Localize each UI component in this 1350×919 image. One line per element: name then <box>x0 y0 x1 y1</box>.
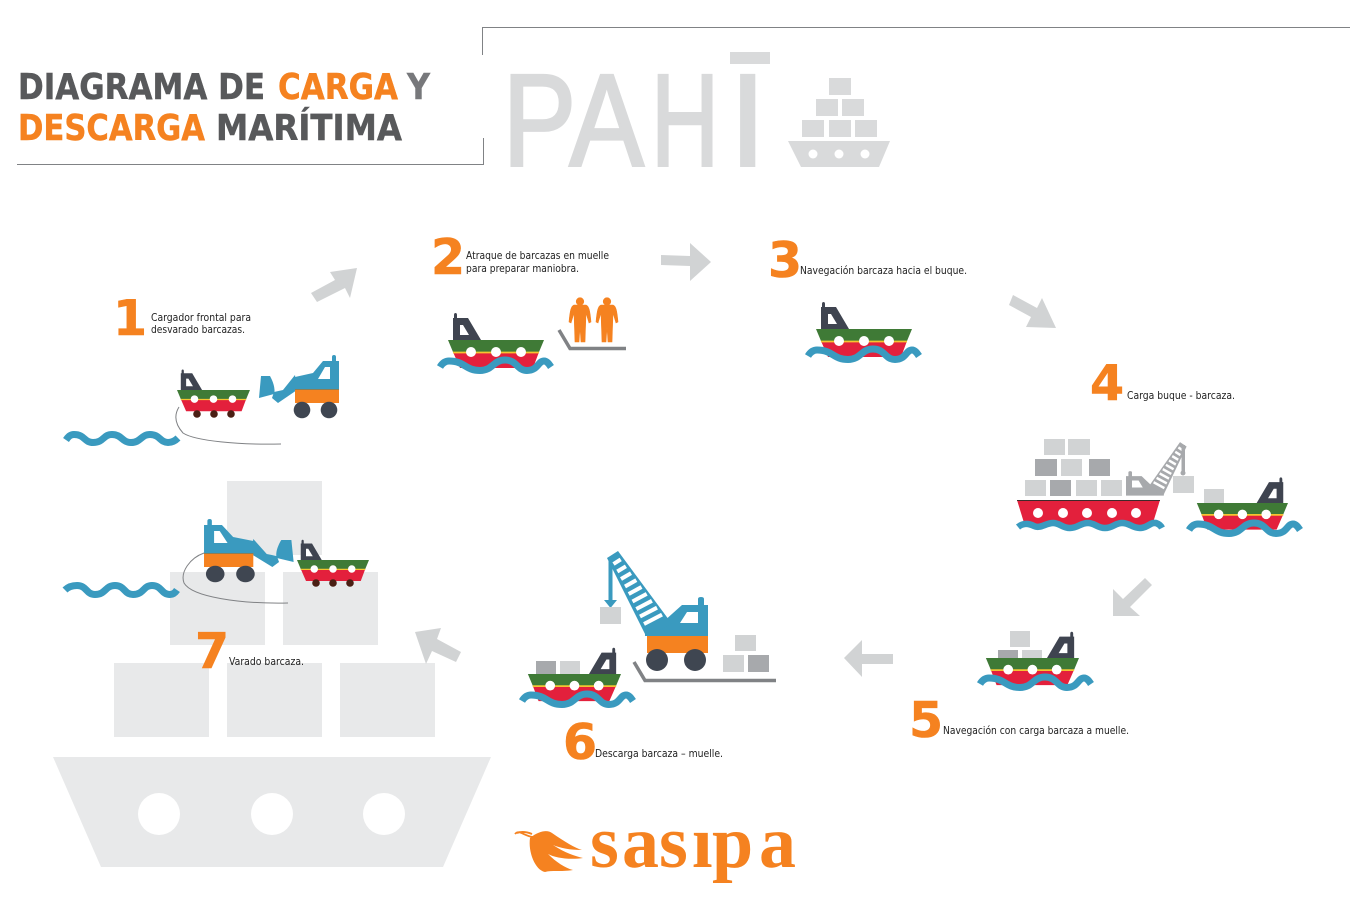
step 1 heading: desvarado barcazas. <box>151 324 245 336</box>
arrow 6 to 7 <box>415 628 461 664</box>
step 7 front loader <box>204 519 294 582</box>
PAHI logo: P <box>503 46 576 194</box>
PAHI logo: I <box>730 46 766 194</box>
step 2 heading: para preparar maniobra. <box>466 263 579 275</box>
step 3 heading: Navegación barcaza hacia el buque. <box>800 265 967 277</box>
step 7 <box>65 519 369 680</box>
step 1 front loader <box>259 355 339 418</box>
step 4 heading <box>1090 355 1235 412</box>
arrow 2 to 3 <box>661 243 711 281</box>
step 7 heading: Varado barcaza. <box>229 656 304 668</box>
PAHI logo: H <box>651 48 719 194</box>
step 2 <box>431 229 626 370</box>
step 5 <box>909 631 1129 749</box>
step 7 heading <box>195 623 304 680</box>
step 4 heading: 4 <box>1090 355 1124 412</box>
step 4 gray crane <box>1126 442 1187 496</box>
step 4 hanging container <box>1173 476 1194 493</box>
title: Y <box>406 67 431 108</box>
step 3 heading <box>768 232 967 289</box>
arrow 5 to 6 <box>844 640 893 677</box>
step 4 barge <box>1189 477 1300 534</box>
title: DESCARGA <box>18 108 205 149</box>
step 1 heading <box>113 290 251 347</box>
step 2 heading: Atraque de barcazas en muelle <box>466 250 609 262</box>
sasipa logo <box>515 802 796 884</box>
arrow 4 to 5 <box>1113 578 1152 616</box>
step 6 heading <box>563 714 723 771</box>
step 1 heading: Cargador frontal para <box>151 312 251 324</box>
arrow 1 to 2 <box>311 268 357 302</box>
PAHI logo: A <box>570 47 644 194</box>
step 3 barge <box>808 302 919 360</box>
step 5 heading: Navegación con carga barcaza a muelle. <box>943 725 1129 737</box>
step 7 barge on wheels <box>297 540 369 587</box>
step 4 heading: Carga buque - barcaza. <box>1127 390 1235 402</box>
title: DIAGRAMA DE <box>18 67 265 108</box>
step 6 dock <box>634 662 776 680</box>
background ship watermark <box>53 481 491 867</box>
step 6 barge <box>522 648 633 704</box>
step 3 heading: 3 <box>768 232 802 289</box>
step 5 heading <box>909 692 1129 749</box>
step 6 crane <box>604 551 708 671</box>
step 7 slipway <box>183 553 288 603</box>
step 7 heading: 7 <box>195 623 229 680</box>
step 6 heading: Descarga barcaza – muelle. <box>595 748 723 760</box>
title: MARÍTIMA <box>216 107 402 149</box>
step 5 barge <box>980 631 1091 688</box>
step 1 <box>66 290 339 444</box>
step 1 heading: 1 <box>113 290 147 347</box>
step 4 container ship <box>1017 439 1162 528</box>
step 6 hanging container <box>600 607 621 624</box>
step 4 <box>1017 355 1300 534</box>
step 2 heading: 2 <box>431 229 465 286</box>
step 1 barge on wheels <box>177 369 250 418</box>
step 2 heading <box>431 229 609 286</box>
step 6 heading: 6 <box>563 714 597 771</box>
step 6 containers on dock <box>723 635 769 672</box>
PAHI logo <box>503 46 890 194</box>
title <box>18 67 431 149</box>
step 6 <box>522 551 776 771</box>
step 1 water <box>66 434 178 442</box>
step 7 water <box>65 586 177 594</box>
logo chili icon <box>515 831 583 872</box>
step 2 dock <box>559 330 626 348</box>
logo wordmark: sasipa <box>590 802 796 884</box>
step 5 heading: 5 <box>909 692 943 749</box>
arrow 3 to 4 <box>1009 295 1056 328</box>
title: CARGA <box>278 67 398 108</box>
step 2 barge <box>440 313 551 370</box>
step 1 slipway <box>176 407 281 444</box>
step 3 <box>768 232 967 360</box>
step 2 workers <box>569 298 618 342</box>
